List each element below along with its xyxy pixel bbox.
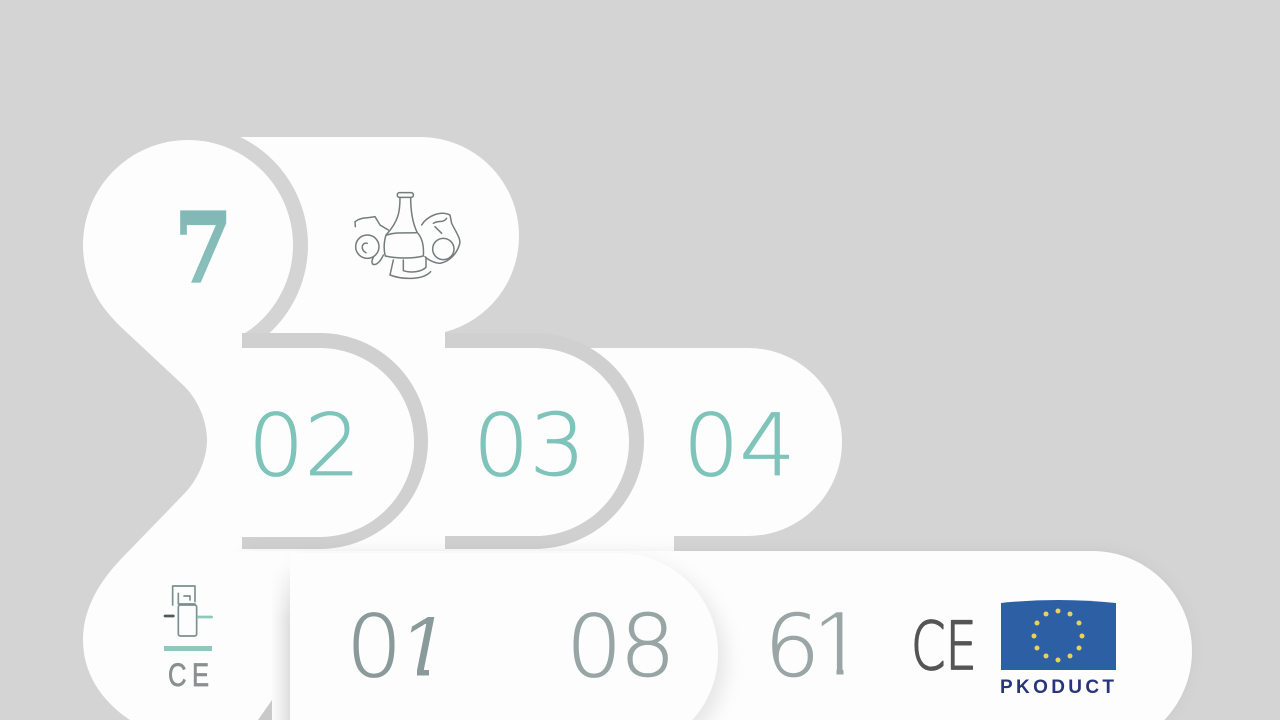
number 01: 1 (397, 599, 447, 695)
number 61 (764, 591, 865, 697)
number 02: 02 (248, 395, 361, 496)
badge label: PKODUCT (1000, 677, 1114, 698)
panel: top pill (240, 137, 519, 552)
panel: step 7 circle (83, 140, 293, 350)
icon: flask and molecules (355, 193, 460, 278)
panel: shaded gutter (276, 582, 290, 720)
number 03: 03 (473, 395, 586, 496)
icon: small device with CE mark (164, 586, 212, 694)
bottom left corner shade (258, 700, 272, 720)
teal bar (164, 646, 212, 651)
number 04: 04 (683, 395, 796, 496)
number 61: 1 (811, 591, 865, 697)
panel: left curved spine (83, 275, 272, 720)
ring around step 03 pill (445, 333, 644, 549)
panel: bottom long pill (243, 551, 1192, 720)
panel: bottom inner pill 01 08 (290, 553, 718, 720)
EU flag product badge (1000, 600, 1116, 698)
flag (1001, 600, 1116, 670)
small CE mark: CE (168, 658, 209, 694)
flag stars (1032, 608, 1084, 662)
number 08: 08 (566, 596, 676, 697)
panel: bottom left circle (130, 552, 272, 720)
number 7: 7 (174, 192, 233, 305)
panel: step 02 pill (242, 348, 414, 537)
number 01: 0 (346, 596, 402, 697)
number 61: 6 (764, 596, 820, 697)
ring around step 02 pill (242, 333, 428, 549)
panel: step 03 pill (445, 348, 629, 536)
device drawing (165, 586, 212, 636)
CE mark: CE (911, 608, 977, 685)
number 01 (346, 596, 448, 697)
panel: step 04 pill (445, 348, 842, 552)
ring around step 7 circle (68, 125, 308, 365)
